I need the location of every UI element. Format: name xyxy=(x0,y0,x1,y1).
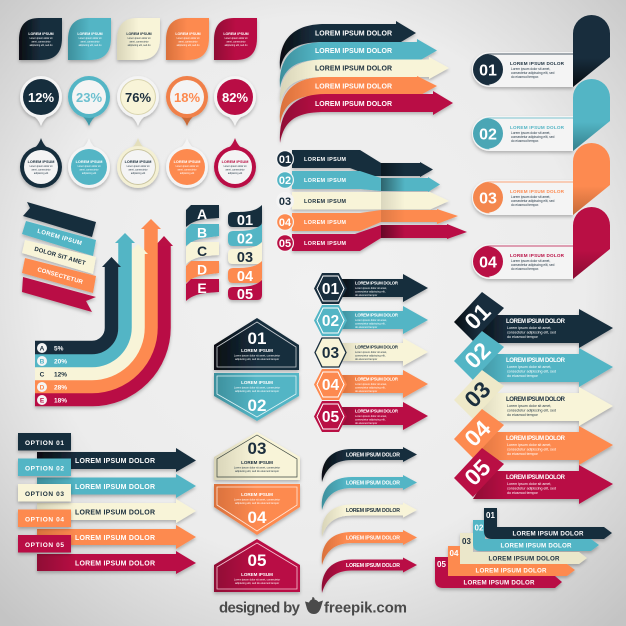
step 02 xyxy=(473,520,599,551)
diamond arrow 05: 05 xyxy=(459,454,496,491)
hex arrow 05: 05 xyxy=(322,409,339,426)
pin 82%: 82% xyxy=(222,90,248,105)
panel: swoosh arrows top xyxy=(280,21,453,143)
house 01: 01 xyxy=(248,329,266,348)
diamond arrow 04: consectetur adipiscing elit, sed xyxy=(507,448,556,452)
diamond arrow 03: LOREM IPSUM DOLOR xyxy=(506,397,566,403)
banner teal strip: LOREM IPSUM xyxy=(36,229,82,247)
round pin crimson: LOREM IPSUM xyxy=(222,160,248,164)
tag 04: 04 xyxy=(237,269,253,285)
leaf card navy: LOREM IPSUM xyxy=(28,32,54,36)
banner navy end xyxy=(23,202,96,237)
ribbon 02: LOREM IPSUM xyxy=(304,178,346,184)
arrow orange: LOREM IPSUM DOLOR xyxy=(315,84,392,90)
hex arrow 04: Lorem ipsum dolor sit amet, xyxy=(355,382,387,386)
house 04 xyxy=(214,484,300,535)
arrow crimson: LOREM IPSUM DOLOR xyxy=(315,101,392,108)
house 03: Lorem ipsum dolor sit amet, consectetur xyxy=(234,466,280,470)
step 02: 02 xyxy=(475,524,484,532)
hex arrow 01: consectetur adipiscing elit, xyxy=(355,290,386,294)
chart labels: C xyxy=(40,372,45,378)
pill card 04 xyxy=(472,207,610,279)
step 03 xyxy=(460,533,587,564)
arrow navy xyxy=(280,21,416,70)
footer credit: freepik.com xyxy=(324,600,407,616)
option row 03: LOREM IPSUM DOLOR xyxy=(75,510,155,516)
chart labels: E xyxy=(40,398,45,404)
diamond arrow 03: consectetur adipiscing elit, sed xyxy=(507,408,556,412)
round pin orange xyxy=(166,138,208,188)
leaf card navy: Lorem ipsum dolor sit xyxy=(30,37,53,40)
leaf card navy xyxy=(19,18,62,60)
ribbon 02: 02 xyxy=(279,175,291,187)
leaf card crimson: LOREM IPSUM xyxy=(223,32,249,36)
option row 03: OPTION 03 xyxy=(25,491,64,498)
hex arrow 01: Lorem ipsum dolor sit amet, xyxy=(355,286,387,290)
leaf card navy: amet, consectetur xyxy=(31,40,51,44)
diamond arrow 05: do eiusmod tempor xyxy=(507,491,539,495)
round pin cream: amet, consectetur xyxy=(128,168,148,172)
curve navy xyxy=(35,257,121,348)
leaf card cream: amet, consectetur xyxy=(129,40,149,44)
diamond arrow 04: 04 xyxy=(459,415,496,452)
wing arrow teal xyxy=(322,475,417,510)
panel: leaf text cards xyxy=(19,18,257,60)
leaf card crimson: Lorem ipsum dolor sit xyxy=(225,37,248,40)
leaf card teal: Lorem ipsum dolor sit xyxy=(79,37,102,40)
pill card 01: do eiusmod tempor. xyxy=(511,75,539,79)
step 05: 05 xyxy=(437,560,446,569)
option row 02: OPTION 02 xyxy=(25,466,64,472)
house 01 xyxy=(214,318,299,370)
pill card 01: consectetur adipiscing elit, sed xyxy=(511,71,555,75)
icon: freepik logo xyxy=(305,597,323,614)
pin 23% xyxy=(68,76,110,126)
wing arrow navy xyxy=(322,447,417,482)
step 05 xyxy=(435,557,562,588)
round pin teal: Lorem ipsum dolor sit xyxy=(78,165,101,168)
option row 01 xyxy=(18,433,196,472)
tag 02: 02 xyxy=(237,232,253,248)
house 03: adipiscing elit, sed do eiusmod tempor xyxy=(235,469,279,473)
wing arrow teal: LOREM IPSUM DOLOR xyxy=(346,480,400,486)
hex arrow 01: do eiusmod tempor xyxy=(355,293,377,297)
pin 12% xyxy=(20,76,62,126)
ribbon 04 xyxy=(276,209,458,231)
leaf card orange: LOREM IPSUM xyxy=(175,32,201,36)
pill card 02: do eiusmod tempor. xyxy=(511,139,539,143)
leaf card orange: Lorem ipsum dolor sit xyxy=(177,37,200,40)
step 05: LOREM IPSUM DOLOR xyxy=(464,580,535,586)
diamond arrow 04: do eiusmod tempor xyxy=(507,452,539,456)
house 02: Lorem ipsum dolor sit amet, consectetur xyxy=(234,386,280,390)
round pin cream: Lorem ipsum dolor sit xyxy=(127,165,150,168)
house 04: 04 xyxy=(248,508,267,527)
pill card 02: consectetur adipiscing elit, sed xyxy=(511,135,555,139)
option row 05: LOREM IPSUM DOLOR xyxy=(75,560,155,568)
hex arrow 02: Lorem ipsum dolor sit amet, xyxy=(355,318,387,322)
hex arrow 04 xyxy=(314,369,428,400)
hex arrow 03: Lorem ipsum dolor sit amet, xyxy=(355,350,387,354)
diamond arrow 01: Lorem ipsum dolor sit amet, xyxy=(507,326,551,330)
arrow teal xyxy=(280,39,437,88)
diamond arrow 05: LOREM IPSUM DOLOR xyxy=(506,475,566,481)
option row 03 xyxy=(18,484,196,523)
house 04: Lorem ipsum dolor sit amet, consectetur xyxy=(234,498,280,502)
hex arrow 05: LOREM IPSUM DOLOR xyxy=(355,408,399,414)
step 04: LOREM IPSUM DOLOR xyxy=(476,568,547,574)
panel: curved arrow chart xyxy=(35,219,173,405)
option row 01: LOREM IPSUM DOLOR xyxy=(75,458,155,465)
hex arrow 02: do eiusmod tempor xyxy=(355,325,377,329)
round pin crimson: amet, consectetur xyxy=(225,168,245,172)
house 02: adipiscing elit, sed do eiusmod tempor xyxy=(235,389,279,393)
hex arrow 02 xyxy=(314,305,428,336)
diamond arrow 01 xyxy=(454,292,613,348)
hex arrow 04: consectetur adipiscing elit, xyxy=(355,386,386,390)
pill card 02: Lorem ipsum dolor sit amet, xyxy=(511,131,550,135)
panel: pill cards right xyxy=(472,15,610,279)
round pin cream: adipiscing elit xyxy=(131,172,146,175)
round pin teal: amet, consectetur xyxy=(79,168,99,172)
leaf card navy: adipiscing elit, sed do xyxy=(30,44,53,47)
arrow cream xyxy=(280,57,449,105)
diamond arrow 04: Lorem ipsum dolor sit amet, xyxy=(507,443,551,447)
tag C: C xyxy=(197,243,207,259)
curve orange xyxy=(35,219,161,386)
leaf card cream: adipiscing elit, sed do xyxy=(128,44,151,47)
tag A: A xyxy=(197,206,207,222)
pill card 02 xyxy=(472,79,610,151)
round pin navy xyxy=(20,138,62,188)
tag 01: 01 xyxy=(237,213,253,229)
leaf card crimson: adipiscing elit, sed do xyxy=(225,44,248,47)
footer credit xyxy=(219,597,407,616)
leaf card orange xyxy=(166,18,209,60)
diamond arrow 04: LOREM IPSUM DOLOR xyxy=(506,436,566,442)
diamond arrow 03 xyxy=(454,370,613,426)
leaf card teal: LOREM IPSUM xyxy=(77,32,103,36)
leaf card crimson: amet, consectetur xyxy=(226,40,246,44)
panel: house shapes xyxy=(214,318,300,592)
arrow crimson xyxy=(280,91,453,143)
pill card 04: consectetur adipiscing elit, sed xyxy=(511,263,555,267)
hex arrow 04: 04 xyxy=(322,377,339,394)
panel: numbered ribbons xyxy=(276,150,467,252)
pin 23%: 23% xyxy=(76,90,102,105)
option row 02 xyxy=(18,458,196,498)
pill card 03: consectetur adipiscing elit, sed xyxy=(511,199,555,203)
arrow navy: LOREM IPSUM DOLOR xyxy=(315,30,392,38)
leaf card orange: adipiscing elit, sed do xyxy=(177,44,200,47)
pill card 04: LOREM IPSUM DOLOR xyxy=(510,253,565,258)
house 04: adipiscing elit, sed do eiusmod tempor xyxy=(235,501,279,505)
diamond arrow 05 xyxy=(454,448,613,504)
chart labels: A xyxy=(40,346,45,352)
diamond arrow 03: do eiusmod tempor xyxy=(507,413,539,417)
pin 76% xyxy=(117,76,159,126)
ribbon 04: 04 xyxy=(279,217,292,229)
round pin orange: LOREM IPSUM xyxy=(174,160,200,164)
house 01: adipiscing elit, sed do eiusmod tempor xyxy=(235,357,279,361)
banner cream strip: DOLOR SIT AMET xyxy=(33,247,86,267)
pill card 01 xyxy=(472,15,610,87)
chart labels: 5% xyxy=(54,346,64,352)
pill card 03: 03 xyxy=(479,190,497,208)
step 01: LOREM IPSUM DOLOR xyxy=(512,530,584,538)
step 04: 04 xyxy=(450,549,459,558)
diamond arrow 02: do eiusmod tempor xyxy=(507,374,539,378)
panel: hexagon arrows xyxy=(314,273,428,432)
panel: large diamond arrows xyxy=(454,292,613,504)
option row 02: LOREM IPSUM DOLOR xyxy=(75,484,155,491)
diamond arrow 03: 03 xyxy=(459,376,496,413)
leaf card crimson xyxy=(214,18,257,60)
pill card 03: LOREM IPSUM DOLOR xyxy=(510,189,565,194)
pill card 02: 02 xyxy=(479,126,497,144)
panel: round text pins xyxy=(20,138,256,188)
step 04 xyxy=(448,546,575,576)
house 04: LOREM IPSUM xyxy=(241,492,273,497)
hex arrow 05 xyxy=(314,401,428,432)
diamond arrow 01: LOREM IPSUM DOLOR xyxy=(506,319,566,325)
chart labels: 28% xyxy=(54,384,67,392)
curve teal xyxy=(35,233,135,360)
round pin teal xyxy=(68,138,110,188)
house 02: 02 xyxy=(248,396,266,415)
hex arrow 03: 03 xyxy=(322,345,339,362)
step 03: LOREM IPSUM DOLOR xyxy=(488,556,560,562)
round pin orange: amet, consectetur xyxy=(177,168,197,172)
chart labels: 18% xyxy=(54,398,67,404)
hex arrow 05: Lorem ipsum dolor sit amet, xyxy=(355,414,387,418)
leaf card teal: amet, consectetur xyxy=(80,40,100,44)
diamond arrow 04 xyxy=(454,409,613,465)
wing arrow crimson xyxy=(322,558,417,593)
house 05: LOREM IPSUM xyxy=(241,572,273,577)
pill card 01: 01 xyxy=(479,62,497,80)
pin 12%: 12% xyxy=(28,90,54,105)
leaf card teal xyxy=(68,18,111,60)
ribbon 04: LOREM IPSUM xyxy=(304,220,346,226)
option row 05 xyxy=(18,535,196,574)
hex arrow 03 xyxy=(315,338,428,367)
curve crimson xyxy=(35,236,173,400)
diamond arrow 01: do eiusmod tempor xyxy=(507,335,539,339)
hex arrow 04: do eiusmod tempor xyxy=(355,389,377,393)
ribbon 03: 03 xyxy=(279,196,291,208)
round pin navy: adipiscing elit xyxy=(34,172,49,175)
round pin teal: adipiscing elit xyxy=(82,172,97,175)
round pin orange: adipiscing elit xyxy=(180,172,195,175)
wing arrow cream xyxy=(322,502,417,537)
banner orange strip: CONSECTETUR xyxy=(36,267,84,286)
panel: wing arrows xyxy=(322,447,417,593)
pill card 03 xyxy=(472,143,610,215)
round pin navy: LOREM IPSUM xyxy=(28,160,54,164)
diamond arrow 03: Lorem ipsum dolor sit amet, xyxy=(507,404,551,408)
round pin teal: LOREM IPSUM xyxy=(76,160,102,164)
hex arrow 03: do eiusmod tempor xyxy=(355,357,377,361)
tag 05: 05 xyxy=(237,287,253,303)
leaf card cream xyxy=(117,18,160,60)
panel: percentage pins xyxy=(20,76,256,126)
diamond arrow 02 xyxy=(454,331,613,387)
round pin navy: Lorem ipsum dolor sit xyxy=(30,165,53,168)
hex arrow 05: do eiusmod tempor xyxy=(355,421,377,425)
chart labels: B xyxy=(40,358,45,366)
ribbon 05 xyxy=(276,224,467,252)
house 02: LOREM IPSUM xyxy=(241,380,273,385)
pin 18% xyxy=(166,76,208,126)
step 01 xyxy=(484,508,612,539)
house 03: LOREM IPSUM xyxy=(241,460,273,465)
hex arrow 02: consectetur adipiscing elit, xyxy=(355,322,386,326)
house 05: adipiscing elit, sed do eiusmod tempor xyxy=(235,581,279,585)
curve cream xyxy=(35,244,148,374)
ribbon 03 xyxy=(276,192,449,210)
leaf card cream: Lorem ipsum dolor sit xyxy=(128,37,151,40)
house 05: Lorem ipsum dolor sit amet, consectetur xyxy=(234,578,280,582)
hex arrow 02: LOREM IPSUM DOLOR xyxy=(355,312,399,318)
diamond arrow 01: 01 xyxy=(459,298,496,335)
ribbon 02 xyxy=(276,171,440,192)
leaf card cream: LOREM IPSUM xyxy=(126,32,152,36)
diamond arrow 02: Lorem ipsum dolor sit amet, xyxy=(507,365,551,369)
step 03: 03 xyxy=(462,537,471,546)
leaf card teal: adipiscing elit, sed do xyxy=(79,44,102,47)
wing arrow crimson: LOREM IPSUM DOLOR xyxy=(346,563,400,569)
round pin orange: Lorem ipsum dolor sit xyxy=(176,165,199,168)
ribbon 01: 01 xyxy=(279,154,291,166)
banner crimson end xyxy=(22,277,96,312)
chart labels: 12% xyxy=(54,372,67,378)
leaf card orange: amet, consectetur xyxy=(178,40,198,44)
house 05 xyxy=(214,539,300,592)
pill card 04: Lorem ipsum dolor sit amet, xyxy=(511,259,550,263)
ribbon 05: 05 xyxy=(279,238,291,250)
hex arrow 04: LOREM IPSUM DOLOR xyxy=(355,376,399,382)
wing arrow navy: LOREM IPSUM DOLOR xyxy=(346,452,400,458)
house 03: 03 xyxy=(248,439,266,458)
option row 04: OPTION 04 xyxy=(25,516,64,524)
panel: stepped tab arrows xyxy=(435,508,612,588)
hex arrow 05: consectetur adipiscing elit, xyxy=(355,418,386,422)
tag D: D xyxy=(197,262,207,278)
pill card 03: do eiusmod tempor. xyxy=(511,203,539,207)
tag 03: 03 xyxy=(237,250,253,266)
house 02 xyxy=(214,373,299,421)
panel: slanted banner xyxy=(22,202,96,312)
ribbon 01 xyxy=(276,150,433,177)
panel: option arrows xyxy=(18,433,196,574)
chart labels: 20% xyxy=(54,358,67,366)
pill card 03: Lorem ipsum dolor sit amet, xyxy=(511,195,550,199)
arrow cream: LOREM IPSUM DOLOR xyxy=(315,66,392,72)
arrow orange xyxy=(280,76,437,124)
step 01: 01 xyxy=(486,511,495,520)
round pin cream xyxy=(117,138,159,188)
diamond arrow 02: LOREM IPSUM DOLOR xyxy=(506,358,566,364)
option row 05: OPTION 05 xyxy=(25,542,64,549)
option row 01: OPTION 01 xyxy=(25,440,64,447)
step 02: LOREM IPSUM DOLOR xyxy=(500,542,572,550)
hex arrow 02: 02 xyxy=(322,313,339,330)
panel: number tags 01-05 xyxy=(228,205,262,303)
hex arrow 03: consectetur adipiscing elit, xyxy=(355,354,386,358)
panel: letter tags A-E xyxy=(186,205,219,301)
house 01: LOREM IPSUM xyxy=(241,348,273,353)
house 03 xyxy=(214,432,300,480)
hex arrow 03: LOREM IPSUM DOLOR xyxy=(355,344,399,350)
hex arrow 01 xyxy=(314,273,428,304)
hex arrow 01: 01 xyxy=(322,281,339,298)
diamond arrow 05: Lorem ipsum dolor sit amet, xyxy=(507,482,551,486)
footer credit: designed by xyxy=(219,600,301,616)
tag B: B xyxy=(197,224,207,240)
diamond arrow 01: consectetur adipiscing elit, sed xyxy=(507,330,556,334)
tag E: E xyxy=(197,280,207,296)
diamond arrow 02: 02 xyxy=(459,337,496,374)
round pin cream: LOREM IPSUM xyxy=(125,160,151,164)
option row 04 xyxy=(18,510,196,549)
chart labels xyxy=(37,343,67,405)
round pin crimson xyxy=(214,138,256,188)
wing arrow cream: LOREM IPSUM DOLOR xyxy=(346,508,400,514)
pill card 01: Lorem ipsum dolor sit amet, xyxy=(511,67,550,71)
pill card 04: 04 xyxy=(479,254,497,272)
arrow teal: LOREM IPSUM DOLOR xyxy=(315,48,392,55)
ribbon 05: LOREM IPSUM xyxy=(304,241,346,247)
pin 18%: 18% xyxy=(174,90,200,105)
pin 76%: 76% xyxy=(125,90,151,105)
pill card 04: do eiusmod tempor. xyxy=(511,267,539,271)
chart labels: D xyxy=(40,384,45,392)
house 01: Lorem ipsum dolor sit amet, consectetur xyxy=(234,354,280,358)
round pin crimson: adipiscing elit xyxy=(228,172,243,175)
wing arrow orange: LOREM IPSUM DOLOR xyxy=(346,536,400,542)
round pin navy: amet, consectetur xyxy=(31,168,51,172)
round pin crimson: Lorem ipsum dolor sit xyxy=(224,165,247,168)
house 05: 05 xyxy=(248,551,266,570)
option row 04: LOREM IPSUM DOLOR xyxy=(75,535,155,542)
ribbon 01: LOREM IPSUM xyxy=(304,157,346,163)
wing arrow orange xyxy=(322,530,417,565)
diamond arrow 05: consectetur adipiscing elit, sed xyxy=(507,486,556,490)
hex arrow 01: LOREM IPSUM DOLOR xyxy=(355,280,399,286)
pill card 01: LOREM IPSUM DOLOR xyxy=(510,61,565,66)
pill card 02: LOREM IPSUM DOLOR xyxy=(510,125,565,130)
pin 82% xyxy=(214,76,256,126)
ribbon 03: LOREM IPSUM xyxy=(304,199,346,205)
diamond arrow 02: consectetur adipiscing elit, sed xyxy=(507,370,556,374)
